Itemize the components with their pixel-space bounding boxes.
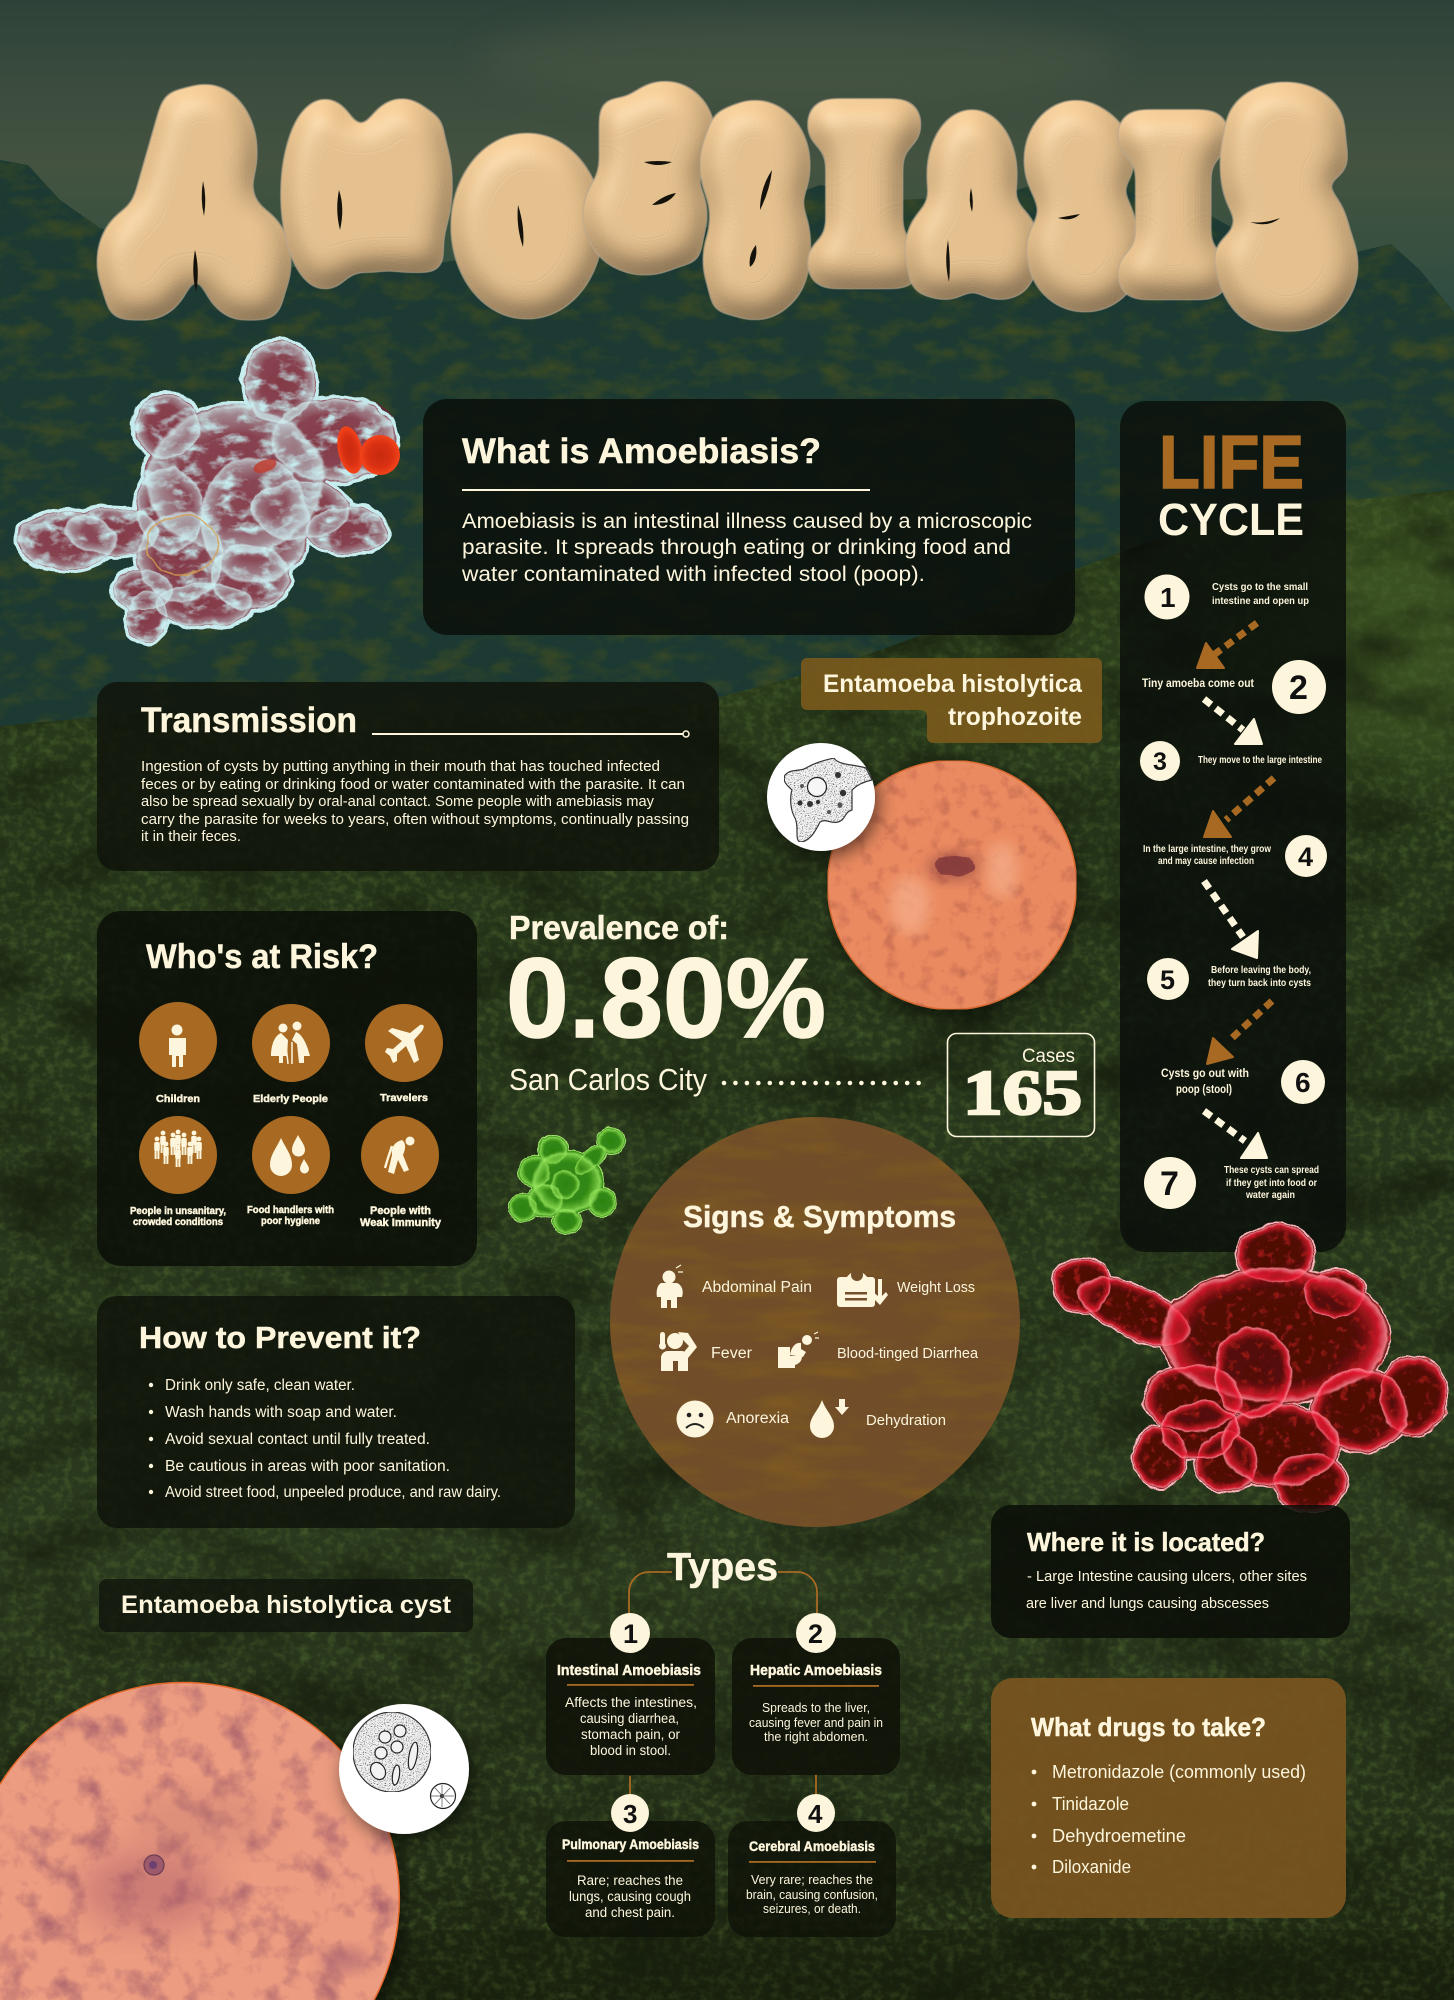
amoeba illustration: green (509, 1128, 625, 1234)
icon: food handlers: poor hygiene (261, 1216, 320, 1227)
card: pulmonary amoebiasis (546, 1794, 715, 1937)
title: Amoebiasis bubble letters: S (1034, 78, 1131, 335)
panel: signs and symptoms: Blood-tinged Diarrhea (837, 1345, 979, 1362)
arrow: step 3 to 4 (1204, 778, 1274, 837)
icon: elderly people (252, 1004, 330, 1105)
icon: weak immunity: Weak Immunity (360, 1217, 441, 1229)
microscope image: cyst (0, 1683, 399, 2000)
step 2: Tiny amoeba come out (1142, 678, 1254, 690)
heading: types: Types (667, 1546, 778, 1589)
panel: signs and symptoms: Weight Loss (897, 1279, 975, 1296)
icon: food handlers: Food handlers with (247, 1205, 334, 1216)
panel: signs and symptoms: Fever (711, 1345, 752, 1362)
step 3 (1140, 741, 1322, 781)
arrow: step 6 to 7 (1204, 1111, 1267, 1158)
step 7: if they get into food or (1226, 1178, 1317, 1189)
text block: transmission body (141, 758, 689, 845)
icon: weak immunity (360, 1116, 441, 1229)
text block: drug list (1032, 1762, 1306, 1877)
text block: definition: parasite. It spreads through eating or drinking food and (462, 536, 1011, 559)
heading: where it is located: Where it is located? (1027, 1527, 1265, 1557)
card: hepatic amoebiasis: 2 (808, 1619, 823, 1649)
label: trophozoite: Entamoeba histolytica (823, 670, 1083, 698)
panel: transmission (97, 682, 719, 871)
card: intestinal amoebiasis: stomach pain, or (581, 1727, 680, 1742)
icon: crowded conditions: People in unsanitary, (130, 1206, 226, 1217)
icon: travelers: Travelers (380, 1092, 428, 1104)
step 4: 4 (1298, 842, 1313, 872)
step 5: Before leaving the body, (1211, 964, 1311, 976)
step 7 (1144, 1157, 1319, 1209)
label: cyst: Entamoeba histolytica cyst (121, 1591, 452, 1619)
panel: what drugs to take (991, 1678, 1346, 1918)
icon: trophozoite drawing (767, 743, 875, 851)
card: intestinal amoebiasis: causing diarrhea, (580, 1711, 679, 1726)
text block: transmission body: also be spread sexually by oral-anal contact. Some people with amebiasis may (141, 793, 654, 810)
text block: prevention list: Avoid street food, unpeeled produce, and raw dairy. (165, 1484, 501, 1501)
text block: prevention list: Be cautious in areas with poor sanitation. (165, 1458, 450, 1475)
icon: elderly people: Elderly People (253, 1093, 328, 1105)
text block: drug list: Tinidazole (1052, 1794, 1129, 1814)
cases box: 165 (963, 1058, 1082, 1128)
icon: fever (659, 1332, 697, 1371)
icon: children (139, 1002, 217, 1105)
icon: blood-tinged diarrhea (778, 1332, 819, 1368)
icon: red blood cells (252, 424, 400, 476)
text block: transmission body: Ingestion of cysts by putting anything in their mouth that has touched infected (141, 758, 660, 775)
icon: dehydration (810, 1399, 849, 1438)
arrow: step 1 to 2 (1197, 623, 1257, 668)
icon: travelers (365, 1004, 443, 1104)
label: trophozoite: trophozoite (948, 703, 1082, 731)
step 1 (1144, 574, 1309, 620)
types section (546, 1546, 900, 1937)
text block: prevention list: Avoid sexual contact until fully treated. (165, 1431, 430, 1448)
step 1: 1 (1160, 582, 1176, 613)
card: hepatic amoebiasis: causing fever and pain in (749, 1716, 883, 1730)
icon: anorexia sad face (676, 1400, 714, 1438)
arrow: step 4 to 5 (1204, 881, 1258, 958)
step 5 (1147, 958, 1311, 1000)
step 5: 5 (1160, 965, 1175, 995)
text block: definition: Amoebiasis is an intestinal illness caused by a microscopic (462, 510, 1032, 533)
panel: signs and symptoms: Anorexia (726, 1410, 789, 1427)
prevalence statistic: Prevalence of: (509, 909, 729, 946)
icon: children: Children (156, 1093, 200, 1105)
title: Amoebiasis bubble letters: I (1131, 78, 1215, 327)
panel: how to prevent it (97, 1296, 575, 1528)
microscope image: trophozoite (828, 760, 1076, 1010)
step 6 (1161, 1060, 1325, 1104)
step 5: they turn back into cysts (1208, 977, 1311, 989)
card: intestinal amoebiasis (546, 1613, 715, 1775)
heading: who's at risk: Who's at Risk? (146, 938, 378, 976)
card: hepatic amoebiasis: Hepatic Amoebiasis (750, 1662, 882, 1679)
card: cerebral amoebiasis: seizures, or death. (763, 1902, 861, 1916)
arrow: step 2 to 3 (1204, 699, 1262, 744)
card: cerebral amoebiasis (728, 1794, 896, 1937)
text block: drug list: Metronidazole (commonly used) (1052, 1762, 1306, 1782)
step 3: 3 (1153, 748, 1167, 776)
icon: crowded conditions: crowded conditions (133, 1217, 223, 1228)
heading: drugs: What drugs to take? (1031, 1712, 1266, 1742)
card: pulmonary amoebiasis: Rare; reaches the (577, 1873, 683, 1888)
heading: life cycle: CYCLE (1158, 494, 1304, 545)
amoeba illustration: red (1053, 1224, 1447, 1512)
text block: drug list: Dehydroemetine (1052, 1826, 1186, 1846)
step 6: Cysts go out with (1161, 1066, 1249, 1080)
title: Amoebiasis bubble letters: I (821, 68, 907, 316)
card: hepatic amoebiasis: Spreads to the liver, (762, 1701, 870, 1715)
amoeba illustration: pale cyan with red blood cells (17, 340, 397, 642)
title: Amoebiasis bubble letters: B (712, 76, 806, 345)
step 1: intestine and open up (1212, 595, 1309, 607)
icon: crowded conditions (130, 1116, 226, 1228)
step 1: Cysts go to the small (1212, 581, 1308, 593)
card: intestinal amoebiasis: Affects the intestines, (565, 1695, 697, 1710)
panel: where it is located (991, 1505, 1350, 1638)
card: hepatic amoebiasis (732, 1613, 900, 1775)
heading: what is amoebiasis: What is Amoebiasis? (462, 432, 821, 471)
text block: definition: water contaminated with infected stool (poop). (461, 563, 925, 586)
panel: signs and symptoms: Abdominal Pain (702, 1279, 812, 1296)
heading: life cycle (1158, 420, 1304, 545)
step 7: These cysts can spread (1224, 1165, 1319, 1176)
arrow: step 5 to 6 (1207, 1001, 1272, 1064)
card: cerebral amoebiasis: Cerebral Amoebiasis (749, 1838, 875, 1854)
heading: life cycle: LIFE (1159, 420, 1304, 504)
icon: abdominal pain (657, 1265, 683, 1308)
cases box: Cases (1022, 1046, 1075, 1067)
text block: location: are liver and lungs causing abscesses (1026, 1595, 1269, 1612)
step 4: and may cause infection (1158, 856, 1254, 867)
text block: transmission body: it in their feces. (141, 828, 241, 845)
card: cerebral amoebiasis: 4 (808, 1799, 823, 1829)
icon: weak immunity: People with (370, 1205, 431, 1217)
prevalence statistic (506, 909, 930, 1097)
icon: cyst drawing (339, 1704, 469, 1834)
card: pulmonary amoebiasis: Pulmonary Amoebiasis (562, 1836, 699, 1852)
label: trophozoite (801, 658, 1102, 743)
prevalence statistic: San Carlos City (509, 1062, 707, 1097)
step 6: poop (stool) (1176, 1082, 1232, 1096)
card: intestinal amoebiasis: blood in stool. (590, 1743, 671, 1758)
panel: signs and symptoms: Dehydration (866, 1412, 946, 1429)
text block: prevention list: Drink only safe, clean water. (165, 1377, 355, 1394)
text block: transmission body: carry the parasite for weeks to years, often without symptoms, continually passing (141, 811, 689, 828)
text block: location (1026, 1568, 1307, 1612)
step 3: They move to the large intestine (1198, 755, 1322, 766)
panel: what is amoebiasis (423, 399, 1075, 635)
card: cerebral amoebiasis: Very rare; reaches the (751, 1873, 873, 1887)
step 7: water again (1245, 1190, 1295, 1201)
title: Amoebiasis bubble letters: O (468, 119, 585, 331)
card: pulmonary amoebiasis: and chest pain. (585, 1905, 675, 1920)
title: Amoebiasis bubble letters: S (1222, 49, 1345, 368)
card: pulmonary amoebiasis: 3 (623, 1799, 637, 1829)
icon: weight loss (837, 1269, 888, 1307)
card: intestinal amoebiasis: 1 (623, 1619, 638, 1649)
card: hepatic amoebiasis: the right abdomen. (764, 1730, 868, 1744)
panel: signs and symptoms (610, 1117, 1020, 1527)
text block: transmission body: feces or by eating or drinking food or water contaminated with the parasite. It can (141, 776, 685, 793)
step 2 (1142, 660, 1326, 714)
title: Amoebiasis bubble letters: A (918, 92, 1023, 322)
step 2: 2 (1289, 669, 1308, 707)
step 7: 7 (1160, 1165, 1179, 1203)
cases box (948, 1034, 1094, 1136)
icon: food handlers (247, 1116, 334, 1227)
card: intestinal amoebiasis: Intestinal Amoebiasis (557, 1662, 701, 1679)
text block: location: - Large Intestine causing ulcers, other sites (1027, 1568, 1307, 1585)
prevalence statistic: 0.80% (506, 935, 826, 1061)
card: pulmonary amoebiasis: lungs, causing cough (569, 1889, 691, 1904)
connectors: types tree (629, 1572, 817, 1796)
text block: drug list: Diloxanide (1052, 1857, 1131, 1877)
panel: life cycle (1120, 401, 1346, 1252)
step 4 (1143, 835, 1327, 877)
panel: who's at risk (97, 911, 477, 1266)
text block: definition (461, 510, 1032, 586)
text block: prevention list: Wash hands with soap and water. (165, 1404, 397, 1421)
heading: how to prevent: How to Prevent it? (139, 1320, 421, 1355)
text block: prevention list (149, 1377, 501, 1501)
card: cerebral amoebiasis: brain, causing confusion, (746, 1888, 878, 1902)
step 6: 6 (1295, 1067, 1311, 1098)
title: Amoebiasis bubble letters: E (600, 70, 697, 294)
label: cyst (99, 1579, 473, 1632)
step 4: In the large intestine, they grow (1143, 844, 1271, 855)
title: Amoebiasis bubble letters: M (292, 81, 446, 305)
title: Amoebiasis bubble letters (97, 49, 1358, 368)
heading: transmission: Transmission (141, 701, 357, 740)
heading: signs and symptoms: Signs & Symptoms (683, 1199, 956, 1234)
title: Amoebiasis bubble letters: A (116, 50, 273, 359)
